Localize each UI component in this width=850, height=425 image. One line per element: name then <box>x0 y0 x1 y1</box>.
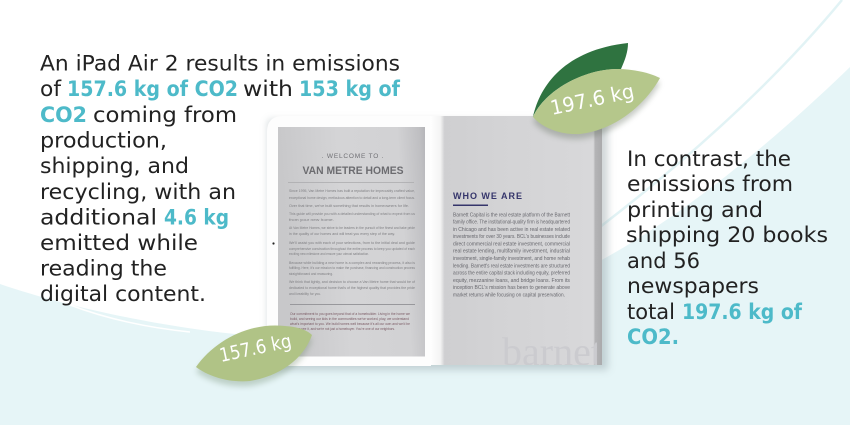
left page body text: We'll assist you with each of your selections, from to the initial deal and guide <box>289 241 415 245</box>
right text block: print emissions: CO2. <box>627 325 679 350</box>
left text block: iPad emissions: digital content. <box>40 282 206 307</box>
welcome heading <box>302 153 404 177</box>
right page body text: direct commercial real estate investment, commercial <box>453 242 570 248</box>
left page body text: At Van Metre Homes, we strive to be leaders in the pursuit of the finest and take pride <box>289 226 415 230</box>
right page body text: investment, single-family investment, and home rehab <box>453 256 570 262</box>
right page body text <box>453 212 571 298</box>
left page body text: from your new home. <box>289 218 334 222</box>
right page body text: across the entire capital stack including equity, preferred <box>453 270 570 276</box>
left text block: iPad emissions: coming from <box>93 103 237 128</box>
left text block: iPad emissions: An iPad Air 2 results in emissions <box>40 52 400 76</box>
right text block: print emissions: and 56 <box>627 249 700 274</box>
left page body text: exciting new milestone and ensure your utmost satisfaction. <box>289 252 369 256</box>
right page body text: lending. Barnett's real estate investments are structured <box>453 264 570 270</box>
left text block: iPad emissions: production, <box>40 128 167 154</box>
left page body text: This guide will provide you with a detailed understanding of what to expect from us <box>289 212 415 216</box>
left page body text: Since 1995, Van Metre Homes has built a reputation for impeccably crafted value, <box>289 189 415 193</box>
right page <box>430 116 613 374</box>
left page body text: exceptional home design, meticulous attention to detail and a long-term client focus. <box>289 196 415 200</box>
right page body text: family office. The institutional-quality firm is headquartered <box>453 220 570 226</box>
left page body text: dedicated to exceptional home that's of the highest quality that provides the pride <box>289 286 415 290</box>
left page body text: fulfilling. Here, it's our mission to make the purchase, financing and construction process <box>289 266 415 270</box>
left text block: iPad emissions: of <box>40 77 61 102</box>
who we are heading: WHO WE ARE <box>453 191 522 201</box>
right text block: print emissions: 197.6 kg of <box>682 300 803 325</box>
leaf badge: 197.6 kg <box>533 43 660 139</box>
right page body text: investments for over 30 years. BCL's businesses include <box>453 234 570 240</box>
right page body text: in Chicago and has been active in real estate related <box>453 227 570 233</box>
small dot <box>272 242 275 245</box>
left page commitment text <box>290 312 410 331</box>
right text block: print emissions: total <box>627 300 675 325</box>
light front leaf <box>533 69 660 134</box>
left text block: iPad emissions: reading the <box>40 256 167 282</box>
right text block: print emissions <box>626 147 828 350</box>
leaf badge: 197.6 kg: 197.6 kg <box>548 79 636 120</box>
left page commitment text: Our commitment to you goes beyond that of a homebuilder. Living in the home we <box>290 312 410 316</box>
left page body text: comprehensive construction throughout the entire process to keep you updated of each <box>289 247 415 251</box>
right page body text: equity, mezzanine loans, and bridge loans. From its <box>453 278 571 284</box>
left page commitment text: way we see it, and we're not just a homebuyer. You're one of our neighbors. <box>290 327 395 331</box>
book shadow <box>268 120 608 370</box>
right text block: print emissions: newspapers <box>627 274 759 299</box>
left page body text <box>289 189 415 296</box>
left page commitment text: what's important to you. We build homes well because it's all our own and we'd be <box>290 322 410 326</box>
left page body text: We think that lightly, and decision to choose a Van Metre home that would be of <box>289 280 415 284</box>
right page body text: inception BCL's mission has been to generate above <box>453 285 570 291</box>
left page body text: in the quality of our homes and will treat you every step of the way. <box>289 232 395 236</box>
left text block: iPad emissions <box>40 52 401 307</box>
left text block: iPad emissions: 157.6 kg of CO2 <box>67 77 238 102</box>
right text block: print emissions: printing and <box>627 198 763 223</box>
right page body text: Barnett Capital is the real estate platform of the Barnett <box>453 212 571 218</box>
dark back leaf <box>533 43 628 117</box>
left page commitment text: build, and seeing our kids in the communities we've worked, play, we understand <box>290 317 409 321</box>
left text block: iPad emissions: additional <box>40 206 157 230</box>
left text block: iPad emissions: recycling, with an <box>40 180 236 205</box>
left text block: iPad emissions: 4.6 kg <box>164 206 229 230</box>
welcome heading: VAN METRE HOMES <box>302 165 404 177</box>
welcome heading: . WELCOME TO . <box>322 153 384 160</box>
leaf badge: 157.6 kg: 157.6 kg <box>217 330 293 367</box>
iPad / left page <box>267 116 431 366</box>
left text block: iPad emissions: emitted while <box>40 231 198 256</box>
left text block: iPad emissions: 153 kg of <box>299 77 401 102</box>
right text block: print emissions: shipping 20 books <box>626 223 828 248</box>
right page body text: real estate lending, multifamily investment, industrial <box>453 248 570 254</box>
left page body text: Because while building a new home is a complex and rewarding process, it also is <box>289 261 415 265</box>
left text block: iPad emissions: with <box>243 77 293 102</box>
leaf badge: 157.6 kg <box>196 325 312 386</box>
right text block: print emissions: emissions from <box>627 172 793 197</box>
barnett watermark: barnett <box>502 329 613 374</box>
left text block: iPad emissions: shipping, and <box>40 154 189 179</box>
right text block: print emissions: In contrast, the <box>627 147 791 172</box>
right page body text: market returns while focusing on capital preservation. <box>453 292 565 298</box>
left page body text: Over that time, we've built something that results in homeowners for life. <box>289 204 409 208</box>
left page body text: straightforward and reassuring. <box>289 272 333 276</box>
left text block: iPad emissions: CO2 <box>40 103 87 128</box>
left page body text: and liveability for you. <box>289 292 321 296</box>
